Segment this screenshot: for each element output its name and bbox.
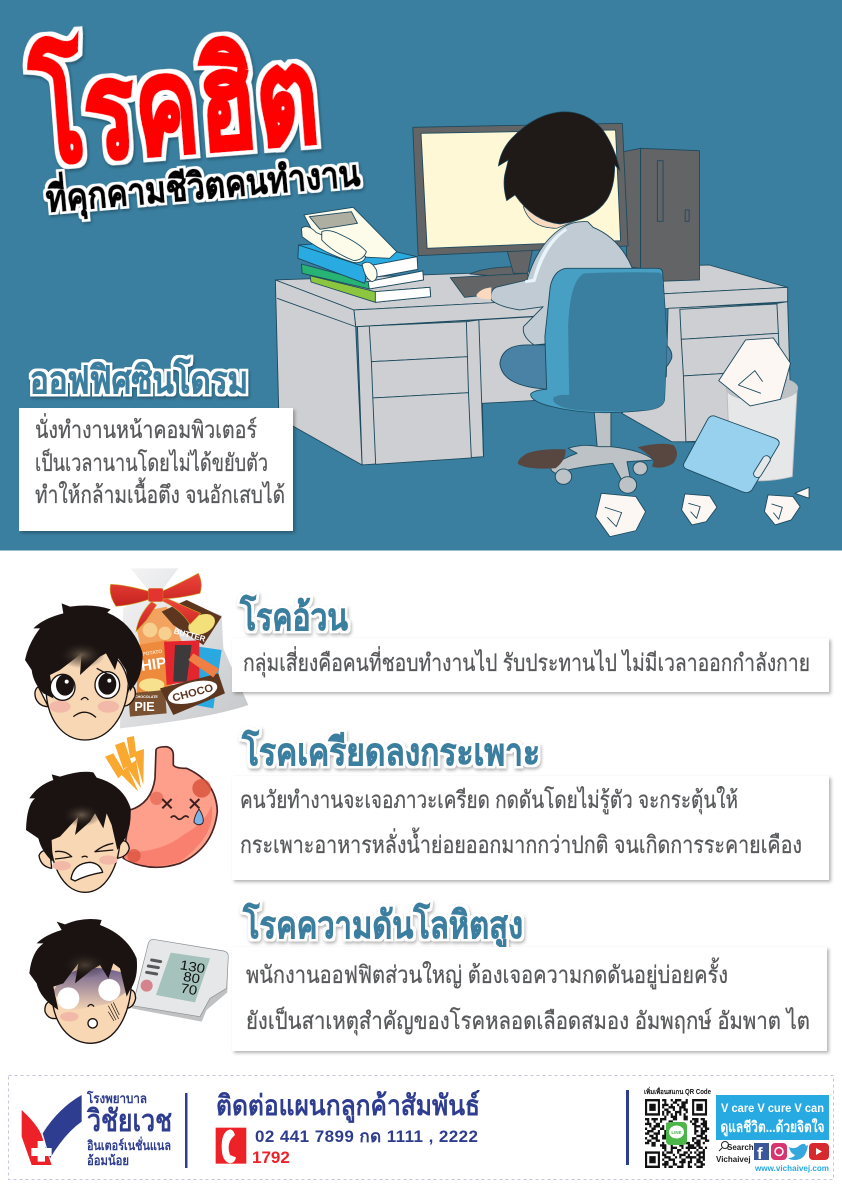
icons: social media — [754, 1143, 829, 1163]
panel: footer — [8, 1076, 834, 1180]
search label — [716, 1142, 754, 1164]
website: www.vichaivej.com — [754, 1163, 829, 1173]
icon: face in pain — [26, 772, 131, 892]
icon: snack bag — [110, 568, 248, 728]
logo: hospital name: อ้อมน้อย — [87, 1153, 129, 1168]
icon: sad stomach — [105, 736, 217, 867]
clipboard — [683, 416, 779, 493]
contact hotline: 1792 — [252, 1148, 290, 1167]
text panel: office syndrome description — [19, 408, 293, 531]
text panel: office syndrome description: นั่งทำงานหน้าคอมพิวเตอร์ — [35, 413, 257, 444]
keyboard — [450, 273, 534, 297]
title: main: โรคฮิต — [25, 16, 323, 192]
heading: hypertension: โรคความดันโลหิตสูง — [242, 902, 523, 949]
icon: snack bag: CHOCO — [171, 682, 215, 704]
logo: hospital name: วิชัยเวช — [86, 1105, 172, 1138]
trousers — [500, 345, 548, 389]
icon: LINE badge: LINE — [671, 1130, 682, 1135]
QR caption: เพิ่มเพื่อนสแกน QR Code — [644, 1086, 711, 1096]
heading: obesity: โรคอ้วน — [239, 594, 348, 639]
contact phone number: 02 441 7899 กด 1111 , 2222 — [255, 1127, 478, 1146]
heading: contact: ติดต่อแผนกลูกค้าสัมพันธ์ — [216, 1090, 480, 1123]
logo: hospital name: โรงพยาบาล — [86, 1090, 147, 1106]
panel: office syndrome hero — [0, 0, 842, 550]
icon: snack bag: BUTTER — [173, 627, 207, 644]
illustration: office worker at desk — [275, 112, 809, 537]
shoes — [518, 449, 566, 469]
text panel: obesity description — [232, 638, 829, 692]
icon: blood pressure monitor: 130 — [179, 957, 206, 976]
panel: stress stomach — [26, 729, 829, 892]
logo: hospital name — [86, 1090, 172, 1168]
title: subtitle: ที่คุกคามชีวิตคนทำงาน — [44, 147, 362, 223]
heading: stress stomach: โรคเครียดลงกระเพาะ — [241, 729, 540, 774]
text panel: office syndrome description: เป็นเวลานานโดยไม่ได้ขยับตัว — [35, 448, 268, 477]
worker head — [498, 112, 620, 228]
icon: snack bag: HIP — [140, 655, 168, 675]
waste bin — [719, 338, 798, 481]
text panel: hypertension description: พนักงานออฟฟิตส่วนใหญ่ ต้องเจอความกดดันอยู่บ่อยครั้ง — [246, 957, 728, 990]
crumpled papers — [596, 487, 809, 537]
icon: blood pressure monitor: 80 — [182, 969, 201, 987]
icon: blood pressure monitor: 70 — [179, 981, 198, 998]
icon: frowning face — [25, 603, 143, 740]
icon: LINE badge — [666, 1122, 687, 1145]
search label: Search — [727, 1143, 754, 1152]
office chair — [531, 268, 667, 493]
divider: left — [185, 1093, 188, 1168]
icons: social media: f — [757, 1144, 763, 1163]
text panel: stress stomach description — [232, 776, 829, 880]
icon: shocked face — [29, 919, 137, 1043]
shirt — [491, 222, 634, 345]
hand — [476, 287, 491, 299]
books and telephone — [298, 207, 431, 302]
logo: hospital name: อินเตอร์เนชั่นแนล — [87, 1136, 171, 1153]
icon: telephone — [216, 1128, 246, 1164]
logo: hospital mark — [22, 1095, 82, 1165]
divider: right — [626, 1090, 629, 1165]
icon: snack bag: POTATO — [142, 649, 163, 658]
QR code — [645, 1099, 709, 1168]
slogan box: V care V cure V can — [721, 1101, 824, 1115]
icon: snack bag: PIE — [134, 700, 155, 714]
panel: hypertension — [29, 902, 827, 1051]
panel: obesity — [25, 568, 829, 740]
computer tower — [623, 148, 699, 282]
text panel: hypertension description — [232, 947, 827, 1051]
worker figure — [476, 222, 672, 389]
desk — [275, 265, 792, 465]
search label: Vichaivej — [716, 1155, 751, 1164]
icon: snack bag: CHOCOLATE — [135, 695, 158, 699]
monitor — [413, 123, 628, 277]
icon: blood pressure monitor — [132, 939, 228, 1022]
heading: office syndrome: ออฟฟิศซินโดรม — [30, 357, 248, 402]
text panel: office syndrome description: ทำให้กล้ามเนื้อตึง จนอักเสบได้ — [35, 477, 285, 509]
slogan box — [716, 1095, 829, 1140]
